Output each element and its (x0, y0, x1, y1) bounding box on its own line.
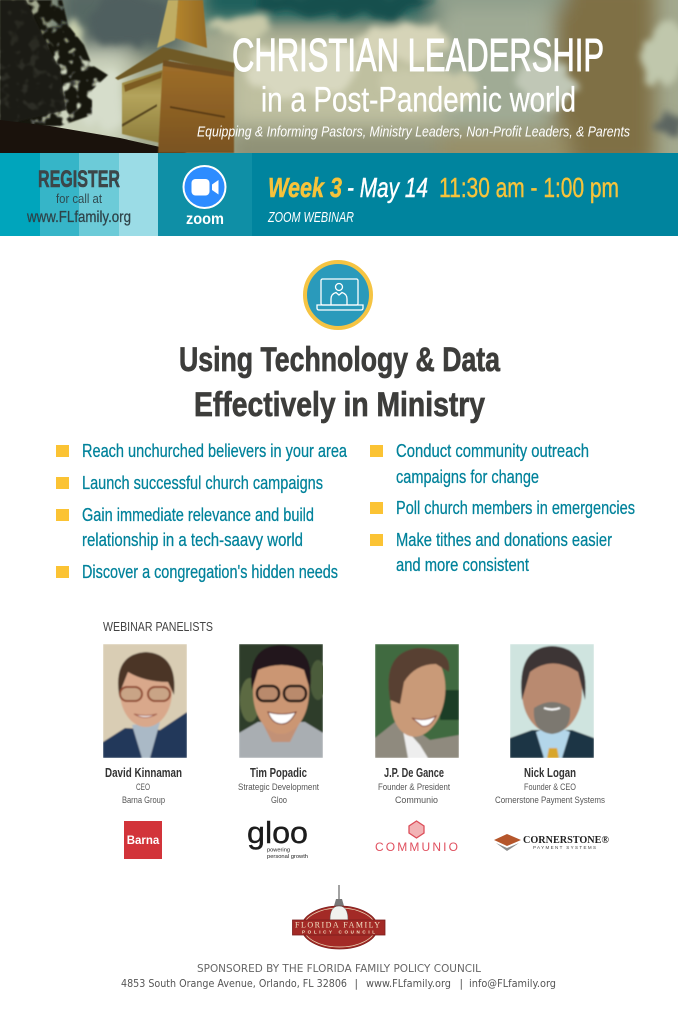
address and contact line (121, 978, 556, 990)
panelist: Nick Logan (495, 644, 605, 806)
logo: Florida Family Policy Council: FLORIDA FAMILY (295, 920, 380, 930)
logo: Cornerstone (494, 834, 609, 851)
bullet list: right column (370, 441, 635, 575)
bullet list: right column: Make tithes and donations easier (396, 530, 612, 550)
ground wall (0, 120, 187, 153)
logo: gloo: personal growth (267, 854, 308, 860)
panelist: Nick Logan: Cornerstone Payment Systems (495, 795, 605, 806)
logo: Barna (124, 821, 162, 859)
webinar info band (0, 153, 678, 236)
title (197, 29, 630, 140)
panelist: Nick Logan: Nick Logan (524, 765, 576, 780)
webinar type: ZOOM WEBINAR (267, 209, 354, 226)
logo: Barna: Barna (127, 835, 160, 847)
date and time (268, 172, 619, 203)
tree (0, 0, 108, 126)
bullet list: left column: Gain immediate relevance and build (82, 505, 314, 525)
address and contact line: | (354, 978, 358, 990)
logo: Communio: COMMUNIO (375, 840, 458, 854)
panelist: J.P. De Gance (375, 644, 459, 806)
bullet list: left column: Reach unchurched believers in your area (82, 441, 348, 461)
date and time: Week 3 (268, 172, 342, 203)
subtitle: in a Post-Pandemic world (261, 80, 576, 120)
icon: zoom logo: zoom (186, 211, 224, 228)
logo: gloo: gloo (247, 815, 308, 850)
sponsor line: SPONSORED BY THE FLORIDA FAMILY POLICY COUNCIL (197, 962, 482, 975)
icon: zoom logo (182, 165, 226, 228)
church steeple (115, 0, 235, 153)
register panel: for call at (56, 191, 102, 206)
register panel: www.FLfamily.org (26, 209, 131, 226)
date and time: - May 14 (347, 172, 428, 203)
register panel: REGISTER (38, 166, 120, 193)
logo: Cornerstone: CORNERSTONE® (523, 834, 609, 846)
panelist: Tim Popadic: Gloo (271, 795, 287, 806)
bullet list: left column: relationship in a tech-saavy world (82, 530, 303, 550)
panelist: Nick Logan: Founder & CEO (524, 782, 576, 793)
bullet list: left column: Launch successful church campaigns (82, 473, 323, 493)
panelist: Tim Popadic (238, 644, 326, 806)
date and time: 11:30 am - 1:00 pm (439, 172, 619, 203)
panelist: David Kinnaman: Barna Group (122, 795, 165, 806)
bullet list: right column: and more consistent (396, 555, 529, 575)
heading: Effectively in Ministry (194, 386, 485, 424)
address and contact line: | (460, 978, 463, 990)
logo: Florida Family Policy Council (292, 885, 385, 949)
address and contact line: 4853 South Orange Avenue, Orlando, FL 32806 (121, 978, 347, 990)
panelist: David Kinnaman (103, 644, 187, 806)
bullet list: right column: campaigns for change (396, 467, 539, 487)
panelist: J.P. De Gance: J.P. De Gance (384, 765, 444, 780)
panelist: Tim Popadic: Tim Popadic (250, 765, 307, 780)
logo: Florida Family Policy Council: POLICY COUNCIL (302, 930, 375, 934)
panelists heading: WEBINAR PANELISTS (103, 619, 213, 634)
logo: Cornerstone: PAYMENT SYSTEMS (533, 845, 596, 850)
heading (179, 341, 501, 424)
address and contact line: www.FLfamily.org (366, 978, 451, 990)
logo: gloo: powering (267, 848, 290, 854)
address and contact line: info@FLfamily.org (469, 978, 556, 990)
panelist: Tim Popadic: Strategic Development (238, 782, 319, 793)
icon: laptop with presenter (305, 262, 371, 328)
panelist: David Kinnaman: CEO (136, 782, 150, 793)
bullet list: left column (56, 441, 348, 582)
panelist: David Kinnaman: David Kinnaman (105, 765, 182, 780)
panelist: J.P. De Gance: Founder & President (378, 782, 450, 793)
hero banner photo (0, 0, 678, 153)
logo: Communio (375, 821, 458, 854)
bullet list: left column: Discover a congregation's hidden needs (82, 562, 338, 582)
bullet list: right column: Conduct community outreach (396, 441, 589, 461)
heading: Using Technology & Data (179, 341, 501, 379)
register panel (0, 153, 158, 236)
panelist: J.P. De Gance: Communio (395, 795, 438, 806)
